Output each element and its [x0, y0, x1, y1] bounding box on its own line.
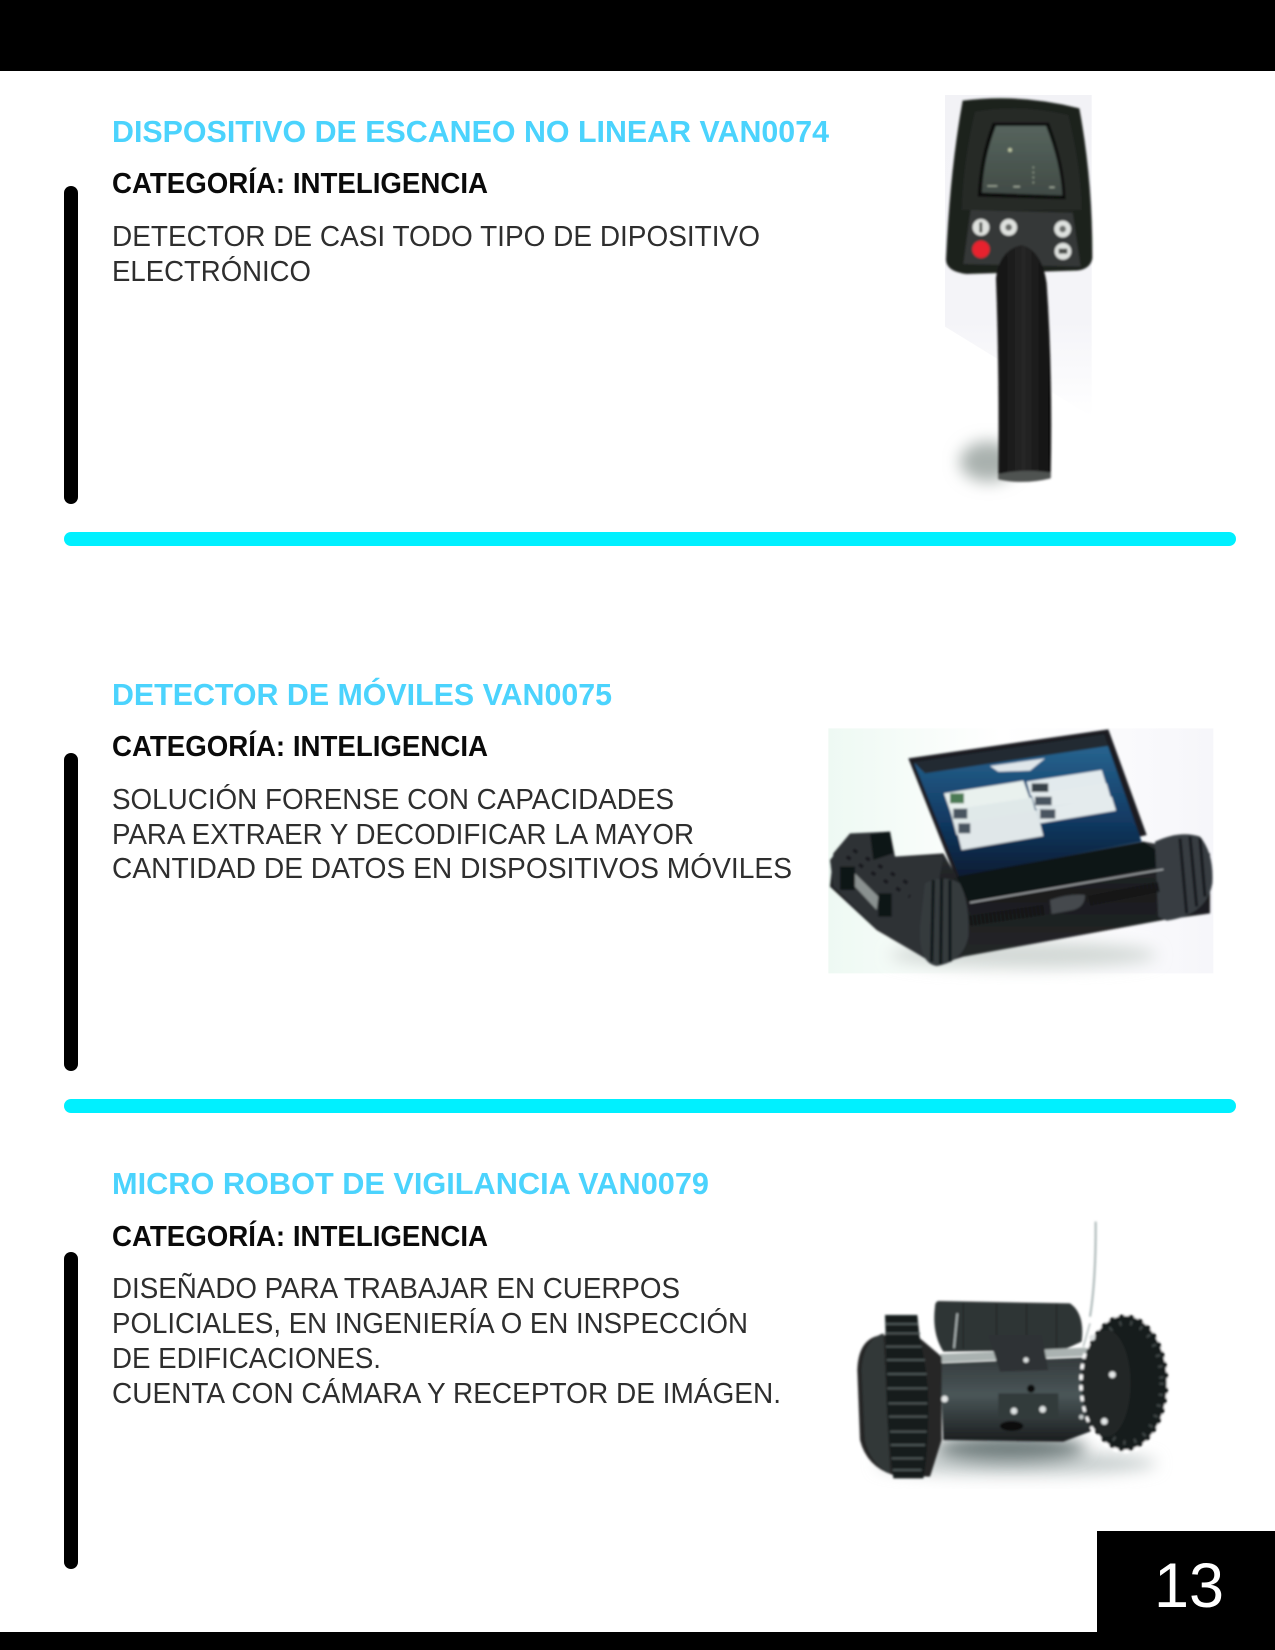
description: device 2: PARA EXTRAER Y DECODIFICAR LA MAYOR [112, 819, 694, 851]
cyan divider 1 [64, 532, 1236, 546]
right wheel [1082, 1314, 1168, 1451]
category: device 3: CATEGORÍA: INTELIGENCIA [112, 1219, 488, 1253]
description: device 2: SOLUCIÓN FORENSE CON CAPACIDADES [112, 783, 674, 816]
title: device 1: DISPOSITIVO DE ESCANEO NO LINEAR VAN0074 [112, 115, 829, 149]
vertical bar: section 3 [64, 1252, 78, 1569]
cyan divider 2 [64, 1099, 1236, 1113]
description: device 3: DISEÑADO PARA TRABAJAR EN CUERPOS [112, 1271, 680, 1305]
vertical bar: section 1 [64, 186, 78, 504]
description: device 2 [112, 783, 792, 885]
section 1: non-linear scanning device [64, 95, 1092, 504]
description: device 3: CUENTA CON CÁMARA Y RECEPTOR DE IMÁGEN. [112, 1377, 781, 1410]
title: device 2: DETECTOR DE MÓVILES VAN0075 [112, 676, 612, 712]
photo: handheld scanner [945, 95, 1092, 482]
top black band [0, 0, 1275, 71]
chassis [830, 832, 1210, 965]
page number box: 13 [1154, 1551, 1224, 1621]
description: device 3: POLICIALES, EN INGENIERÍA O EN INSPECCIÓN [112, 1307, 748, 1340]
category: device 1: CATEGORÍA: INTELIGENCIA [112, 166, 488, 200]
vertical bar: section 2 [64, 753, 78, 1071]
page number box [1097, 1531, 1275, 1650]
description: device 2: CANTIDAD DE DATOS EN DISPOSITIVOS MÓVILES [112, 852, 792, 885]
description: device 3: DE EDIFICACIONES. [112, 1343, 381, 1375]
photo: wheeled micro robot [857, 1222, 1169, 1478]
category: device 2: CATEGORÍA: INTELIGENCIA [112, 729, 488, 763]
description: device 1 [112, 221, 760, 288]
bottom black band [0, 1632, 1275, 1650]
description: device 1: DETECTOR DE CASI TODO TIPO DE DIPOSITIVO [112, 221, 760, 253]
left wheel [857, 1335, 942, 1477]
description: device 1: ELECTRÓNICO [112, 255, 311, 288]
section 3: surveillance micro robot [64, 1167, 1169, 1569]
screen frame [908, 729, 1147, 880]
photo: rugged tablet forensic unit [828, 728, 1213, 973]
section 2: mobile detector [64, 676, 1213, 1071]
title: device 3: MICRO ROBOT DE VIGILANCIA VAN0079 [112, 1167, 709, 1201]
description: device 3 [112, 1271, 781, 1410]
